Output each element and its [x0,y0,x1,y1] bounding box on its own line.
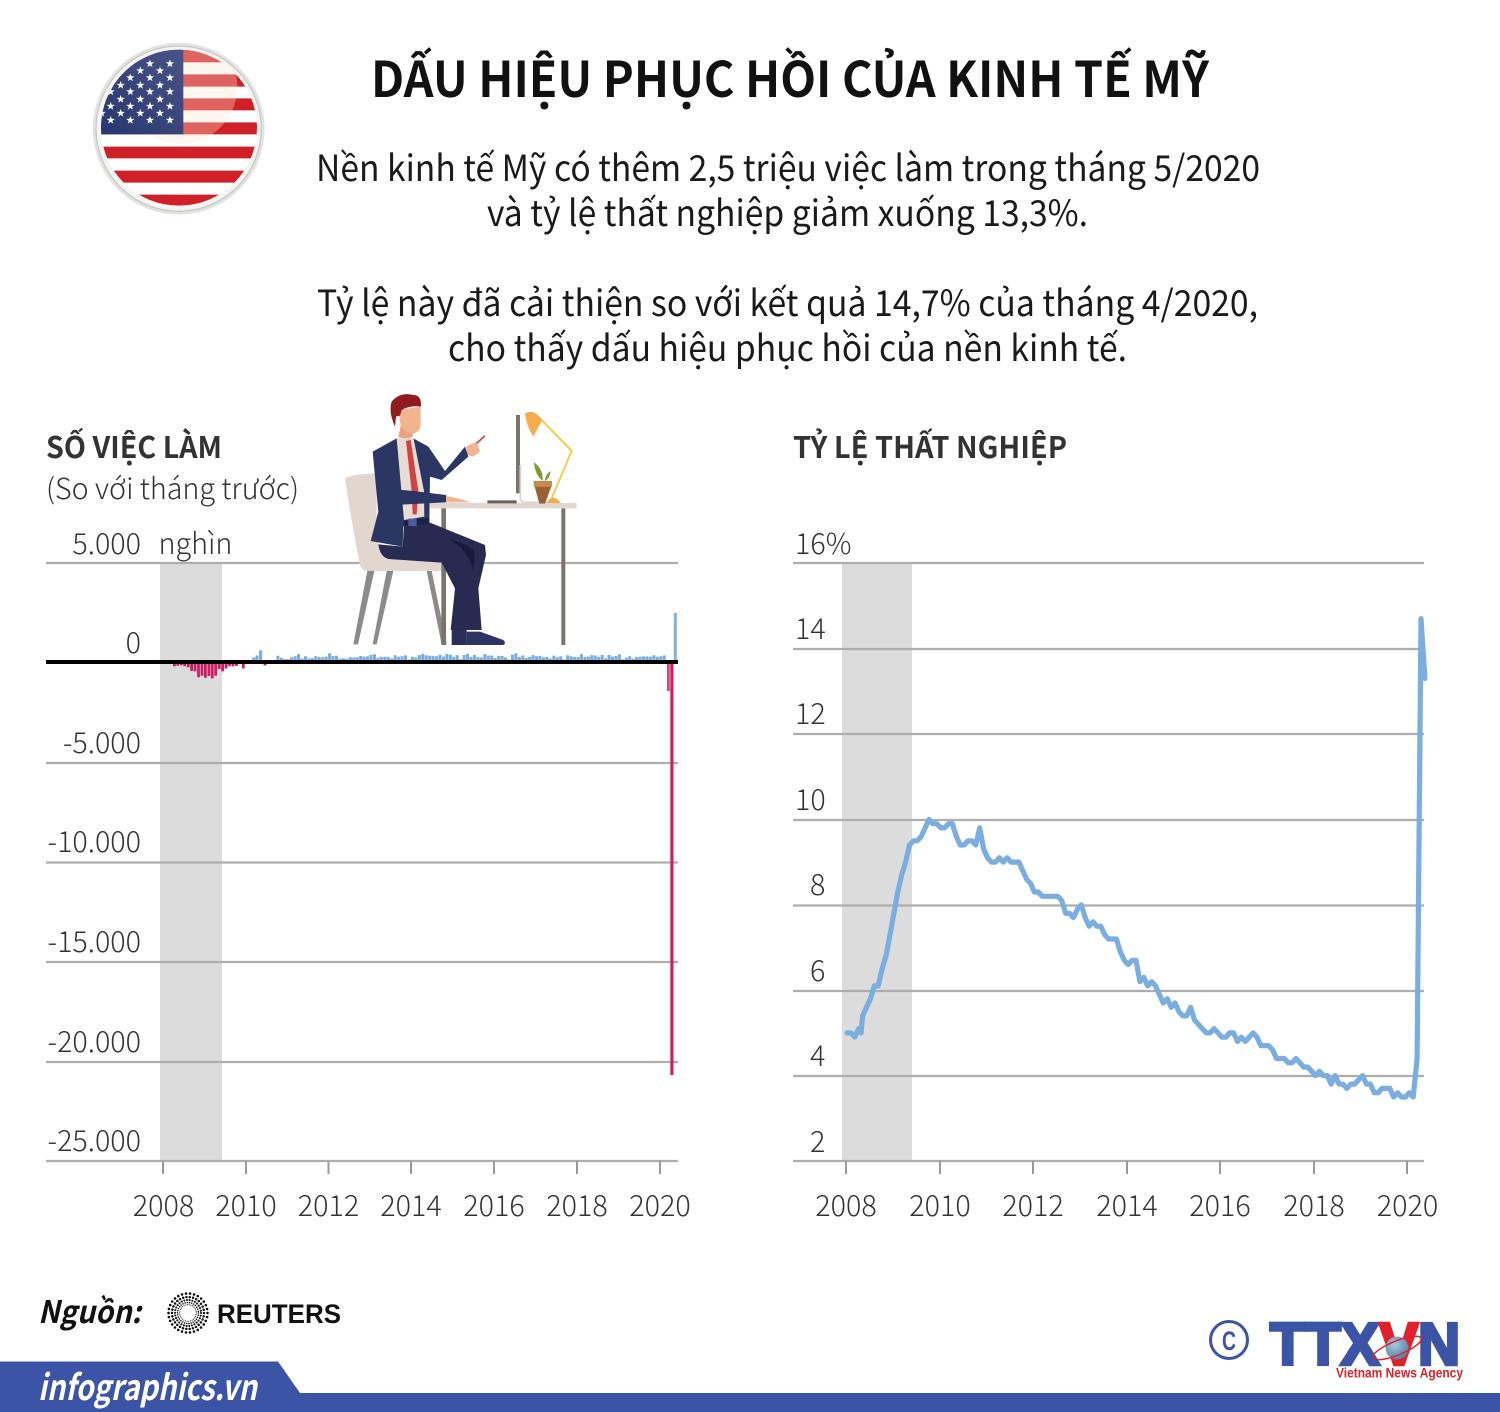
y axis labels: -5.000 [63,721,141,762]
y axis labels: -20.000 [48,1020,141,1061]
logo: TTXVN: Vietnam News Agency [1336,1364,1463,1380]
x axis labels: 2020 [629,1184,691,1225]
x axis labels: 2020 [1377,1184,1438,1225]
subheading: jobs: (So với tháng trước) [46,467,299,508]
y axis labels [795,522,851,1161]
x axis labels: 2016 [1189,1184,1251,1225]
icon: US flag badge: ★★★★ [106,86,175,98]
y axis labels: -10.000 [48,820,141,861]
x axis labels: 2012 [298,1184,359,1225]
icon: Reuters dot ring [168,1294,208,1332]
x axis labels [815,1184,1438,1225]
y axis labels: 14 [795,607,826,648]
icon: US flag badge: ★★★★ [97,107,165,119]
positive bars [254,650,664,660]
bar: March 2020 [667,662,670,691]
x axis labels: 2010 [909,1184,971,1225]
axis ticks [163,1161,660,1174]
x axis labels: 2010 [215,1184,277,1225]
y axis labels: 10 [795,778,826,819]
x axis labels: 2016 [463,1184,525,1225]
text block: intro [316,140,1260,372]
grid lines [793,563,1424,1161]
text block: intro: và tỷ lệ thất nghiệp giảm xuống 13,3%. [487,185,1088,237]
y axis labels: 4 [810,1034,825,1075]
text block: intro: cho thấy dấu hiệu phục hồi của nền kinh tế. [448,320,1127,372]
y axis labels: 0 [126,621,141,662]
grid lines [46,563,678,1161]
x axis labels: 2018 [1283,1184,1345,1225]
x axis labels [133,1184,691,1225]
negative bars [174,662,265,678]
x axis labels: 2008 [133,1184,194,1225]
icon: copyright: C [1222,1326,1236,1356]
panel: unemployment chart [793,423,1438,1225]
recession band [842,563,912,1161]
icon: businessman at desk [345,394,577,645]
text block: intro: Nền kinh tế Mỹ có thêm 2,5 triệu việc làm trong tháng 5/2020 [316,140,1260,192]
icon: US flag badge: ★★ [146,57,175,69]
title: DẤU HIỆU PHỤC HỒI CỦA KINH TẾ MỸ [371,41,1210,112]
footer website: infographics.vn [38,1360,259,1411]
icon: US flag badge: ★★★ [126,72,175,84]
icon: US flag badge: ★★★★ [106,114,175,126]
y axis labels: 2 [810,1120,825,1161]
x axis labels: 2014 [1096,1184,1158,1225]
x axis labels: 2014 [380,1184,442,1225]
icon: US flag badge: ★★★ [116,93,165,105]
y axis labels: 6 [810,949,825,990]
y axis labels [48,522,141,1160]
logo: TTXVN: TTXVN [1270,1311,1460,1377]
heading: unemployment: TỶ LỆ THẤT NGHIỆP [793,423,1067,467]
y axis labels: 12 [795,692,826,733]
x axis labels: 2012 [1002,1184,1064,1225]
icon: US flag badge: ★★★★ [106,100,175,112]
recession band [160,563,222,1161]
panel: jobs chart [46,423,691,1225]
y axis labels: 5.000 [72,522,141,563]
heading: jobs: SỐ VIỆC LÀM [46,423,222,467]
source label: Nguồn: [38,1287,143,1332]
icon: US flag badge [93,29,265,215]
y axis labels: 16% [795,522,851,563]
icon: US flag badge: ★★★ [116,79,165,91]
zero line [46,660,678,664]
bar: April 2020 [670,662,674,1075]
line: unemployment rate [847,619,1425,1097]
icon: copyright [1210,1322,1248,1358]
unit label: nghìn [158,522,232,563]
text block: intro: Tỷ lệ này đã cải thiện so với kết quả 14,7% của tháng 4/2020, [317,275,1258,327]
x axis labels: 2008 [815,1184,877,1225]
y axis labels: -25.000 [48,1119,141,1160]
axis ticks [846,1161,1407,1174]
icon: US flag badge: ★★ [136,65,165,77]
x axis labels: 2018 [546,1184,608,1225]
source name: REUTERS [217,1299,341,1329]
y axis labels: 8 [810,863,825,904]
y axis labels: -15.000 [48,920,141,961]
bar: May 2020 [674,613,677,662]
footer band [0,1362,1500,1412]
